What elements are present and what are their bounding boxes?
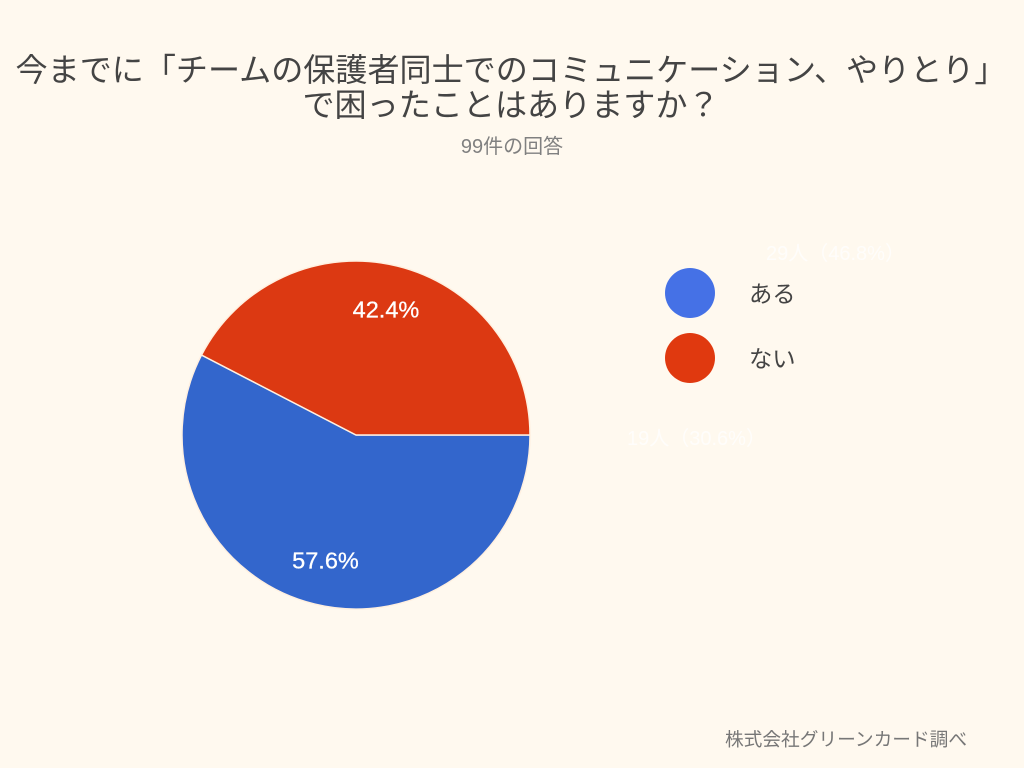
slice: ない 42.4% <box>202 261 530 435</box>
faint label: 29人: 29人（46.8%） <box>766 243 905 265</box>
legend label: ある: ある <box>749 281 796 307</box>
legend label: ない: ない <box>749 346 796 372</box>
faint label: 19人: 19人（30.6%） <box>627 428 766 450</box>
legend <box>665 268 796 383</box>
subtitle: response count: 99件の回答 <box>461 136 563 158</box>
slice: ある 57.6% <box>182 355 530 609</box>
title: 今までに「チームの保護者同士でのコミュニケーション、やりとり」 <box>16 52 1006 88</box>
slice: ある 57.6%: 57.6% <box>292 548 359 574</box>
title: で困ったことはありますか？ <box>302 86 720 122</box>
legend marker: ない <box>664 333 714 383</box>
legend marker: ある <box>664 268 714 318</box>
source credit: 株式会社グリーンカード調べ <box>725 729 967 750</box>
slice: ない 42.4%: 42.4% <box>353 296 419 322</box>
title <box>16 52 1006 122</box>
